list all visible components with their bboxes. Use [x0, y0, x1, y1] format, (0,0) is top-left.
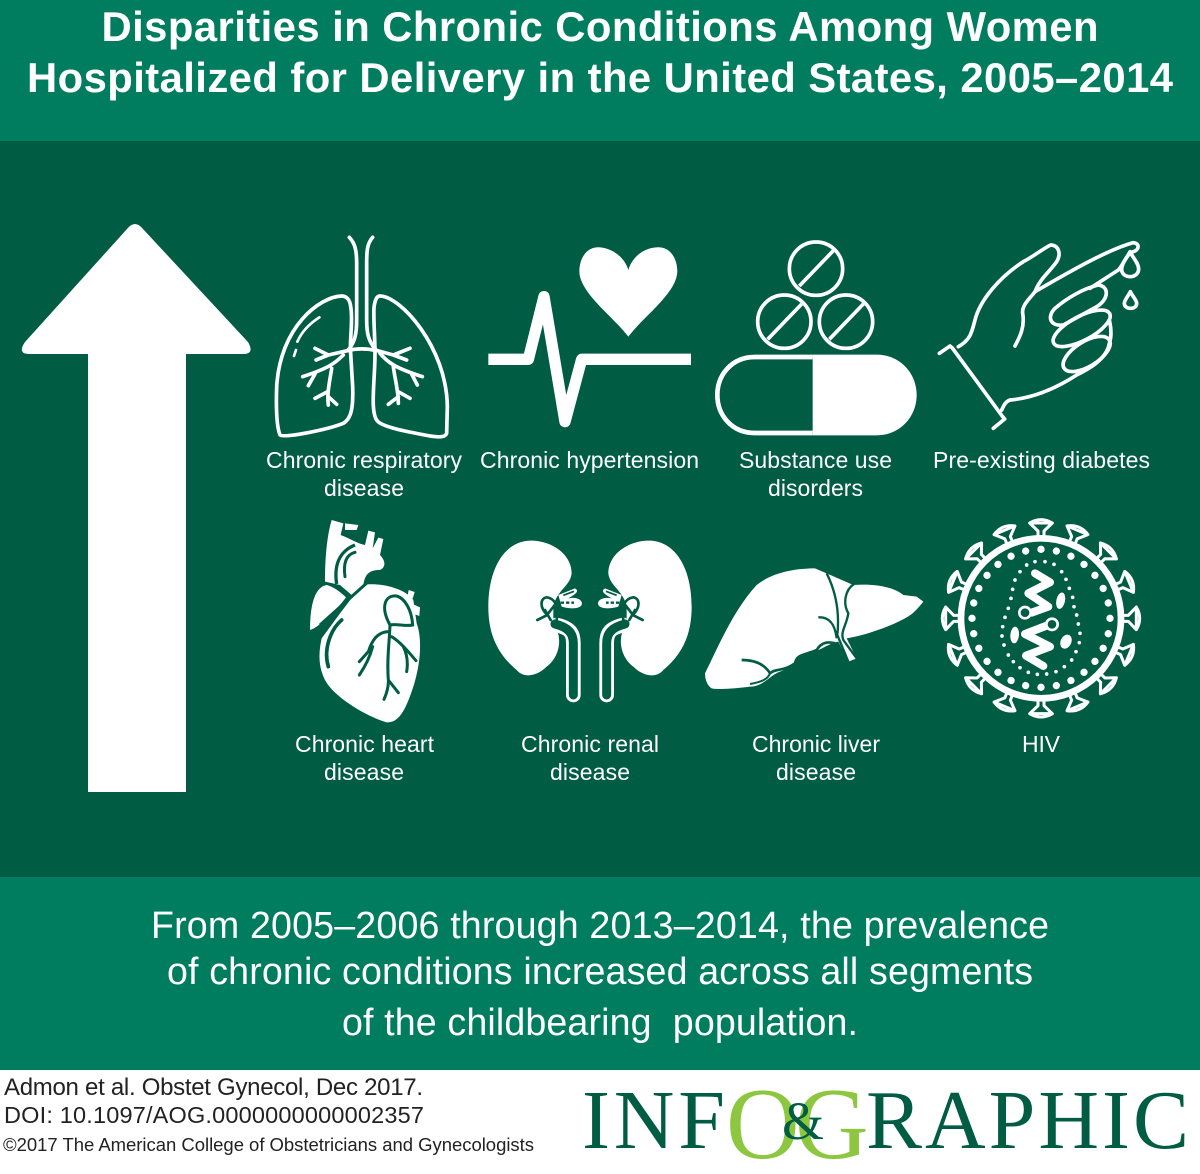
label: chronic respiratory disease: disease [324, 475, 404, 501]
logo: Infographic: & [782, 1091, 824, 1151]
icon: kidneys [488, 541, 692, 695]
icon: hand with blood drop [939, 243, 1139, 428]
summary text [151, 904, 1049, 1043]
panel: title header [0, 0, 1200, 141]
label: chronic liver disease [752, 731, 880, 785]
citation text: ©2017 The American College of Obstetricians and Gynecologists [3, 1134, 534, 1155]
logo: Infographic: INF [582, 1074, 725, 1167]
icon: heart organ [310, 520, 420, 722]
summary text: of chronic conditions increased across all segments [167, 950, 1033, 992]
label: pre-existing diabetes: Pre-existing diabetes [933, 447, 1150, 473]
label: chronic liver disease: disease [776, 759, 856, 785]
label: chronic hypertension: Chronic hypertension [480, 447, 699, 473]
label: chronic respiratory disease: Chronic respiratory [266, 447, 462, 473]
icon: lungs [276, 237, 447, 437]
label: chronic respiratory disease [266, 447, 462, 501]
label: chronic heart disease [295, 731, 435, 785]
label: substance use disorders: Substance use [739, 447, 892, 473]
panel: summary statement [0, 877, 1200, 1070]
title: Disparities in Chronic Conditions Among Women [102, 3, 1098, 50]
label: chronic heart disease: Chronic heart [295, 731, 435, 757]
label: chronic heart disease: disease [324, 759, 404, 785]
icon: HIV virus [942, 520, 1140, 717]
citation text [3, 1074, 534, 1155]
logo: Infographic: RAPHIC [866, 1074, 1189, 1167]
summary text: From 2005–2006 through 2013–2014, the prevalence [151, 904, 1049, 946]
label: chronic renal disease [521, 731, 659, 785]
label: chronic liver disease: Chronic liver [752, 731, 880, 757]
panel: chronic conditions [0, 141, 1200, 877]
label: HIV: HIV [1022, 731, 1061, 757]
icon: pills and capsule [717, 242, 917, 435]
summary text: of the childbearing population. [342, 1001, 858, 1043]
title [27, 3, 1174, 101]
icon: liver [705, 568, 923, 689]
icon: heart with pulse line [488, 247, 691, 422]
label: substance use disorders: disorders [768, 475, 863, 501]
label: substance use disorders [739, 447, 892, 501]
arrow: upward increase [22, 224, 251, 792]
label: chronic renal disease: Chronic renal [521, 731, 659, 757]
logo: Infographic [582, 1068, 1189, 1174]
label: chronic renal disease: disease [550, 759, 630, 785]
title: Hospitalized for Delivery in the United States, 2005–2014 [27, 54, 1174, 101]
citation text: DOI: 10.1097/AOG.0000000000002357 [4, 1102, 424, 1128]
citation text: Admon et al. Obstet Gynecol, Dec 2017. [4, 1074, 423, 1101]
